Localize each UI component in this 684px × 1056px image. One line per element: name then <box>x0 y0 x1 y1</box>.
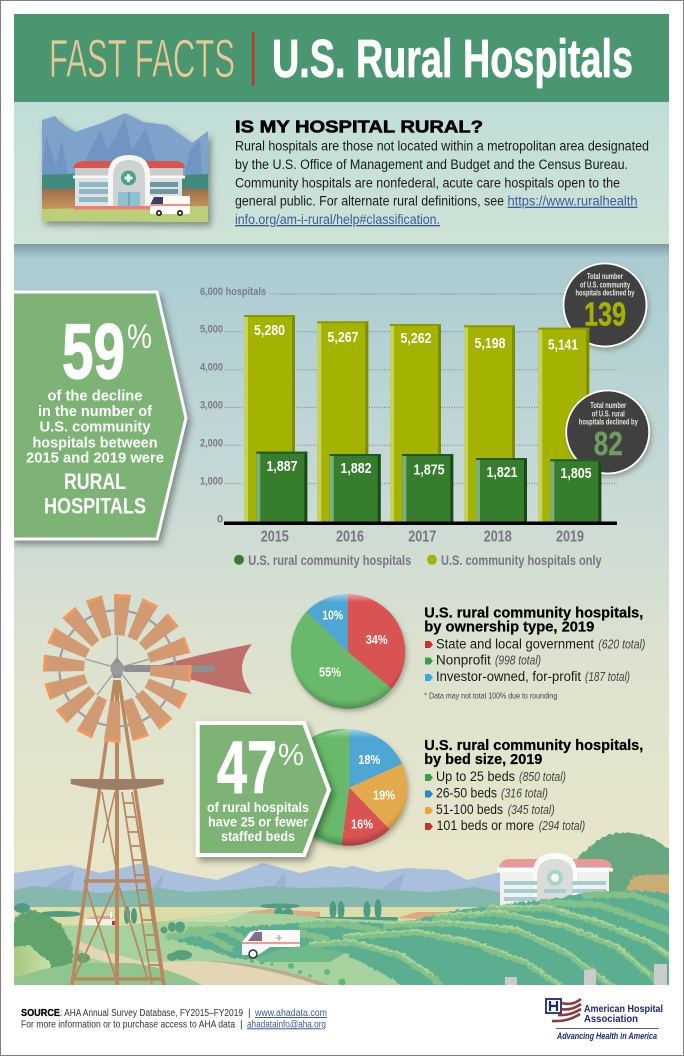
ownership heading: U.S. rural community hospitals, <box>424 605 643 622</box>
y axis labels <box>200 286 266 525</box>
bed size items: 101 beds or more <box>436 818 534 833</box>
year labels: 2019 <box>556 529 584 546</box>
ownership items: (620 total) <box>598 637 645 651</box>
info body text: Rural hospitals are those not located within a metropolitan area designated <box>235 139 649 154</box>
legend: ownership type <box>424 605 645 700</box>
bed size items: (850 total) <box>519 770 566 784</box>
badge: community decline 139: of U.S. community <box>580 280 630 289</box>
badge: rural decline 82 <box>566 390 649 474</box>
source footer: : AHA Annual Survey Database, FY2015–FY2019 <box>60 1008 243 1019</box>
rural bar values: 1,805 <box>560 465 592 482</box>
panel shadow band <box>14 244 669 258</box>
callout: 47 percent <box>198 723 329 855</box>
tail vane <box>153 644 252 694</box>
ambulance <box>242 929 345 962</box>
road <box>75 941 318 985</box>
wheel <box>43 594 192 743</box>
info heading: IS MY HOSPITAL RURAL? <box>235 117 483 137</box>
green ground <box>14 913 430 985</box>
distant trees <box>14 899 398 924</box>
callout: 47 percent: staffed beds <box>221 829 295 844</box>
farmland <box>14 907 487 926</box>
chart legend: U.S. community hospitals only <box>441 552 602 568</box>
ownership items: Nonprofit <box>436 653 491 668</box>
title: fast facts: FAST FACTS <box>49 30 235 89</box>
info body text: general public. For alternate rural definitions, see <box>235 194 504 209</box>
source footer: For more information or to purchase access to AHA data <box>21 1019 235 1030</box>
logo mark <box>546 999 581 1021</box>
bed size heading: by bed size, 2019 <box>424 751 542 768</box>
callout: 59 percent: 59 <box>62 307 125 395</box>
tower <box>71 680 164 985</box>
y axis labels: 1,000 <box>200 475 223 487</box>
y axis labels: 0 <box>217 513 223 525</box>
bed size items: (294 total) <box>539 819 585 833</box>
badge: rural decline 82: 82 <box>594 425 623 462</box>
pie chart: bed size: 18% <box>358 752 381 767</box>
callout: 47 percent: of rural hospitals <box>207 800 309 815</box>
callout: 47 percent: have 25 or fewer <box>208 815 309 830</box>
y axis labels: 6,000 hospitals <box>200 286 266 298</box>
logo: american hospital association: Association <box>584 1013 638 1025</box>
field dots <box>250 959 346 986</box>
badge: community decline 139: Total number <box>587 272 623 281</box>
chart legend <box>234 552 602 568</box>
ownership heading: by ownership type, 2019 <box>424 619 594 636</box>
bed size heading: U.S. rural community hospitals, <box>424 737 643 754</box>
ownership items: (187 total) <box>585 670 630 684</box>
callout: 59 percent: RURAL <box>64 469 126 494</box>
crop rows <box>165 890 675 990</box>
year labels: 2018 <box>484 529 512 546</box>
pie chart: ownership: 55% <box>319 665 341 680</box>
info body text <box>235 139 649 227</box>
bed size items: Up to 25 beds <box>436 769 515 784</box>
ownership items: Investor-owned, for-profit <box>436 669 581 684</box>
bed size items: 26-50 beds <box>436 785 497 800</box>
community bar values: 5,141 <box>548 336 578 354</box>
pie chart: ownership: 34% <box>366 632 388 647</box>
ownership items: State and local government <box>436 636 594 651</box>
badge: community decline 139: hospitals declined by <box>576 288 635 297</box>
logo: american hospital association <box>546 999 663 1042</box>
rounding footnote: * Data may not total 100% due to rounding <box>424 690 558 700</box>
tree top right <box>578 833 672 897</box>
info body text: info.org/am-i-rural/help#classification. <box>235 212 440 227</box>
source footer <box>21 1008 327 1030</box>
community bar values <box>254 322 578 354</box>
year labels: 2016 <box>336 529 364 546</box>
badge: community decline 139: 139 <box>584 296 626 333</box>
year labels <box>261 529 584 546</box>
mountains <box>14 863 500 893</box>
pie chart: bed size <box>284 729 407 846</box>
ownership items: (998 total) <box>495 654 541 668</box>
callout: 47 percent: % <box>278 737 304 772</box>
farm <box>84 912 115 925</box>
bed size items: (345 total) <box>508 803 555 817</box>
panel: is my hospital rural <box>14 102 669 244</box>
rural bar values: 1,882 <box>340 460 372 477</box>
badge: rural decline 82: of U.S. rural <box>592 409 625 418</box>
ownership heading <box>424 605 643 636</box>
info body text: by the U.S. Office of Management and Budget and the Census Bureau. <box>235 157 628 172</box>
ownership items <box>425 636 645 684</box>
source footer: | <box>240 1019 243 1030</box>
community bar values: 5,280 <box>254 322 285 339</box>
callout: 59 percent: of the decline <box>48 388 142 405</box>
rural bar values: 1,875 <box>414 462 444 478</box>
header banner <box>14 14 669 102</box>
info body text: Community hospitals are nonfederal, acute care hospitals open to the <box>235 175 620 190</box>
community bar values: 5,262 <box>400 330 432 347</box>
community bar values: 5,267 <box>328 329 358 346</box>
source footer: ahadatainfo@aha.org <box>247 1019 326 1030</box>
illustration: hospital with mountains <box>42 113 208 222</box>
bed size items <box>425 769 585 833</box>
badge: rural decline 82: Total number <box>590 401 626 410</box>
title divider <box>252 32 254 86</box>
chart legend: U.S. rural community hospitals <box>248 552 411 568</box>
bed size heading <box>424 737 643 768</box>
bar chart: hospitals by year <box>200 264 649 568</box>
teal hills <box>14 886 500 907</box>
callout: 59 percent: hospitals between <box>32 434 158 451</box>
year labels: 2015 <box>261 529 289 546</box>
callout: 59 percent: 2015 and 2019 were <box>26 450 164 467</box>
distant hospital <box>497 853 613 907</box>
rural bar values: 1,821 <box>486 464 518 481</box>
pie chart: bed size: 19% <box>373 787 395 802</box>
year labels: 2017 <box>408 529 436 546</box>
source footer: | <box>248 1008 251 1019</box>
rural bar values: 1,887 <box>266 458 298 475</box>
y axis labels: 2,000 <box>200 437 223 449</box>
y axis labels: 3,000 <box>200 399 223 411</box>
left trees <box>14 909 74 968</box>
callout: 59 percent: % <box>127 318 152 356</box>
badge: community decline 139 <box>564 264 646 346</box>
pie chart: ownership: 10% <box>322 607 344 622</box>
legend: bed size <box>424 737 643 833</box>
badge: rural decline 82: hospitals declined by <box>579 418 638 427</box>
bed size items: (316 total) <box>501 786 548 800</box>
bed size items: 51-100 beds <box>436 802 503 817</box>
pie chart: ownership <box>290 594 405 709</box>
callout: 59 percent: HOSPITALS <box>44 493 146 518</box>
mid bushes <box>160 922 192 961</box>
source footer: www.ahadata.com <box>254 1008 327 1019</box>
windmill <box>43 594 252 985</box>
callout: 59 percent: in the number of <box>38 403 153 420</box>
background gradient panel <box>14 244 669 985</box>
callout: 59 percent: U.S. community <box>40 419 151 436</box>
rural bar values <box>266 458 592 482</box>
tower platform <box>71 779 164 790</box>
callout: 47 percent: 47 <box>217 726 277 809</box>
info body text: https://www.ruralhealth <box>508 194 638 209</box>
source footer: SOURCE <box>21 1008 60 1019</box>
community bar values: 5,198 <box>474 335 506 352</box>
fence posts <box>505 964 667 986</box>
rural hospital bars <box>256 452 601 522</box>
rural scene <box>14 833 675 990</box>
y axis labels: 5,000 <box>200 324 223 336</box>
y axis labels: 4,000 <box>200 362 223 374</box>
logo: american hospital association: American Hospital <box>584 1003 663 1015</box>
pie chart: bed size: 16% <box>351 817 373 832</box>
callout: 59 percent <box>0 0 186 1056</box>
community hospital bars <box>244 315 589 522</box>
